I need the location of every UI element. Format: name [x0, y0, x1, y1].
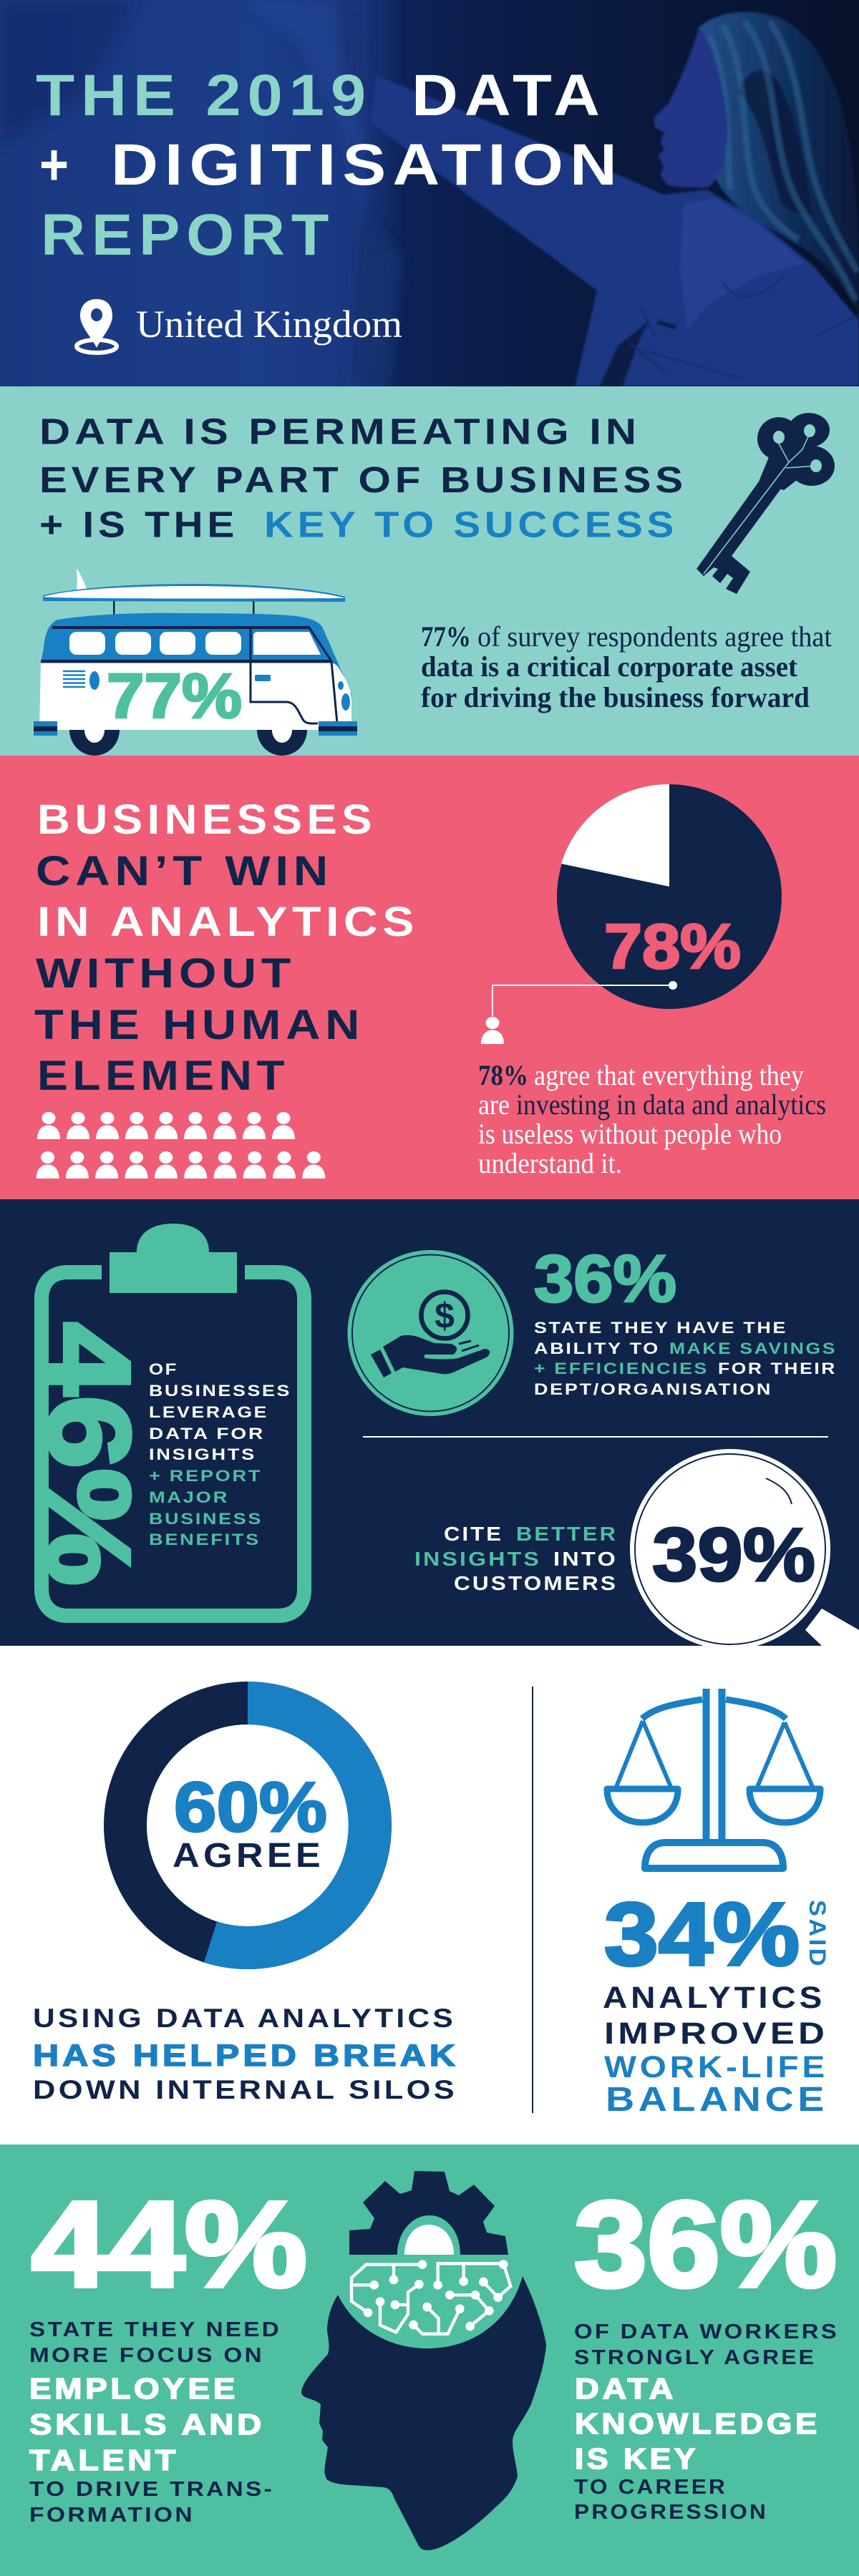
text block: leverage data: [149, 1360, 291, 1548]
callout connector and person icon: [481, 981, 677, 1044]
text block: break down silos: USING DATA ANALYTICS: [33, 2004, 456, 2033]
panel: white section: [0, 1646, 859, 2145]
text block: savings and efficiencies: [534, 1319, 837, 1398]
text block: critical corporate asset: for driving the business forward: [421, 681, 810, 713]
text block: better insights: CUSTOMERS: [454, 1572, 618, 1594]
text block: better insights: INSIGHTS: [414, 1548, 541, 1570]
text block: data knowledge: PROGRESSION: [574, 2501, 768, 2524]
stat: 36% savings: 36%: [534, 1241, 676, 1316]
heading: human element: CAN’T WIN: [36, 848, 333, 894]
icon row: people pictogram: [37, 1112, 325, 1179]
icon: location pin: [77, 299, 117, 353]
text block: break down silos: [33, 2004, 459, 2104]
text block: useless without people: [478, 1059, 826, 1179]
title: DIGITISATION: [111, 132, 623, 197]
panel: skills and knowledge: [0, 2145, 859, 2576]
text block: employee skills: MORE FOCUS ON: [29, 2344, 264, 2367]
text block: data knowledge: IS KEY: [575, 2442, 699, 2475]
text block: work-life balance: WORK-LIFE: [604, 2050, 828, 2084]
title: THE 2019: [36, 63, 372, 128]
stat: 39%: 39%: [652, 1513, 815, 1597]
stat: 77%: 77%: [107, 660, 242, 731]
text block: leverage data: OF: [149, 1360, 178, 1378]
heading: key to success: EVERY PART OF BUSINESS: [39, 459, 687, 500]
stat: 36% data workers: 36%: [574, 2177, 837, 2313]
photo: woman reaching up: [371, 12, 859, 386]
title: +: [39, 132, 69, 197]
panel: human element: [0, 756, 859, 1199]
panel: data is permeating: [0, 386, 859, 756]
text block: employee skills: EMPLOYEE: [29, 2372, 238, 2405]
panel: navy statistics: [0, 1199, 859, 1646]
text block: critical corporate asset: 77%: [421, 620, 471, 653]
illustration: head silhouette with gear: [301, 2171, 546, 2550]
title: [36, 63, 623, 268]
text block: useless without people: investing in data and analytics: [516, 1088, 826, 1121]
text block: work-life balance: BALANCE: [606, 2081, 828, 2119]
icon: hand holding coin: [348, 1250, 514, 1416]
heading: human element: THE HUMAN: [34, 1002, 364, 1048]
pie chart: 78%: [557, 784, 782, 1009]
text block: employee skills: STATE THEY NEED: [29, 2318, 281, 2341]
icon: key: [697, 413, 835, 594]
text block: leverage data: LEVERAGE: [149, 1403, 268, 1421]
text block: better insights: BETTER: [516, 1523, 618, 1545]
text block: savings and efficiencies: ABILITY TO: [534, 1340, 660, 1357]
text block: critical corporate asset: data is a critical corporate asset: [421, 650, 798, 683]
text block: savings and efficiencies: MAKE SAVINGS: [669, 1340, 837, 1357]
stat: 44%: 44%: [31, 2177, 307, 2313]
text block: savings and efficiencies: DEPT/ORGANISATION: [534, 1380, 772, 1398]
text block: leverage data: DATA FOR: [149, 1425, 265, 1443]
stat: 78%: 78%: [604, 911, 741, 982]
heading: key to success: [39, 411, 687, 545]
text block: employee skills: TO DRIVE TRANS-: [29, 2478, 274, 2501]
text block: savings and efficiencies: STATE THEY HAVE THE: [534, 1319, 787, 1337]
stat: 60%: 60%: [174, 1767, 327, 1846]
label: agree: AGREE: [173, 1837, 324, 1875]
text block: employee skills: [29, 2318, 281, 2527]
text block: data knowledge: TO CAREER: [574, 2476, 727, 2499]
text block: useless without people: agree that everything they: [534, 1059, 804, 1091]
text block: critical corporate asset: [421, 620, 832, 713]
text block: data knowledge: OF DATA WORKERS: [574, 2321, 839, 2343]
title: DATA: [412, 63, 606, 128]
text block: leverage data: BENEFITS: [149, 1531, 261, 1548]
text block: savings and efficiencies: + EFFICIENCIES: [534, 1360, 709, 1377]
icon: hand holding coin: $: [435, 1296, 455, 1336]
text block: leverage data: BUSINESS: [149, 1510, 263, 1528]
icon: balance scales: [607, 1679, 820, 1868]
text block: better insights: INTO: [553, 1548, 618, 1570]
heading: human element: IN ANALYTICS: [37, 899, 419, 945]
text block: employee skills: TALENT: [29, 2444, 179, 2477]
text block: leverage data: BUSINESSES: [149, 1382, 291, 1400]
text block: critical corporate asset: of survey respondents agree that: [477, 620, 832, 653]
text block: break down silos: DOWN INTERNAL SILOS: [33, 2075, 457, 2104]
heading: human element: WITHOUT: [36, 950, 296, 997]
heading: human element: [34, 796, 419, 1099]
text block: leverage data: MAJOR: [149, 1488, 229, 1506]
stat: 34%: 34%: [604, 1885, 800, 1984]
text block: useless without people: understand it.: [478, 1147, 622, 1179]
illustration: camper van with 77%: [34, 568, 357, 756]
text block: work-life balance: IMPROVED: [604, 2016, 828, 2051]
location label: United Kingdom: [136, 303, 402, 346]
text block: work-life balance: [603, 1981, 828, 2119]
text block: employee skills: SKILLS AND: [29, 2408, 265, 2441]
text block: useless without people: 78%: [478, 1059, 528, 1091]
title: REPORT: [41, 203, 335, 268]
text block: better insights: CITE: [444, 1523, 503, 1545]
text block: better insights: [414, 1523, 618, 1594]
icon: clipboard: [42, 1224, 304, 1616]
text block: useless without people: is useless without people who: [478, 1118, 782, 1150]
heading: key to success: KEY TO SUCCESS: [264, 504, 678, 545]
text block: useless without people: are: [478, 1088, 510, 1121]
panel: hero header: [0, 0, 859, 386]
text block: work-life balance: ANALYTICS: [603, 1981, 825, 2015]
heading: key to success: DATA IS PERMEATING IN: [39, 411, 641, 452]
heading: human element: ELEMENT: [37, 1053, 289, 1099]
icon: circuit brain: [351, 2260, 510, 2334]
stat: 46% rotated: 46%: [24, 1322, 155, 1586]
text block: leverage data: + REPORT: [149, 1467, 262, 1485]
illustration: magnifying glass with 39%: [630, 1449, 859, 1689]
text block: break down silos: HAS HELPED BREAK: [33, 2039, 459, 2073]
label: said: SAID: [805, 1900, 830, 1968]
text block: data knowledge: KNOWLEDGE: [575, 2407, 820, 2440]
donut chart: 60% agree: [125, 1703, 370, 1948]
text block: data knowledge: DATA: [575, 2372, 676, 2405]
text block: leverage data: INSIGHTS: [149, 1445, 256, 1463]
text block: savings and efficiencies: FOR THEIR: [718, 1360, 837, 1377]
text block: employee skills: FORMATION: [29, 2504, 195, 2527]
heading: human element: BUSINESSES: [37, 796, 377, 843]
text block: data knowledge: STRONGLY AGREE: [574, 2346, 816, 2369]
text block: data knowledge: [574, 2321, 839, 2524]
heading: key to success: + IS THE: [39, 504, 238, 545]
